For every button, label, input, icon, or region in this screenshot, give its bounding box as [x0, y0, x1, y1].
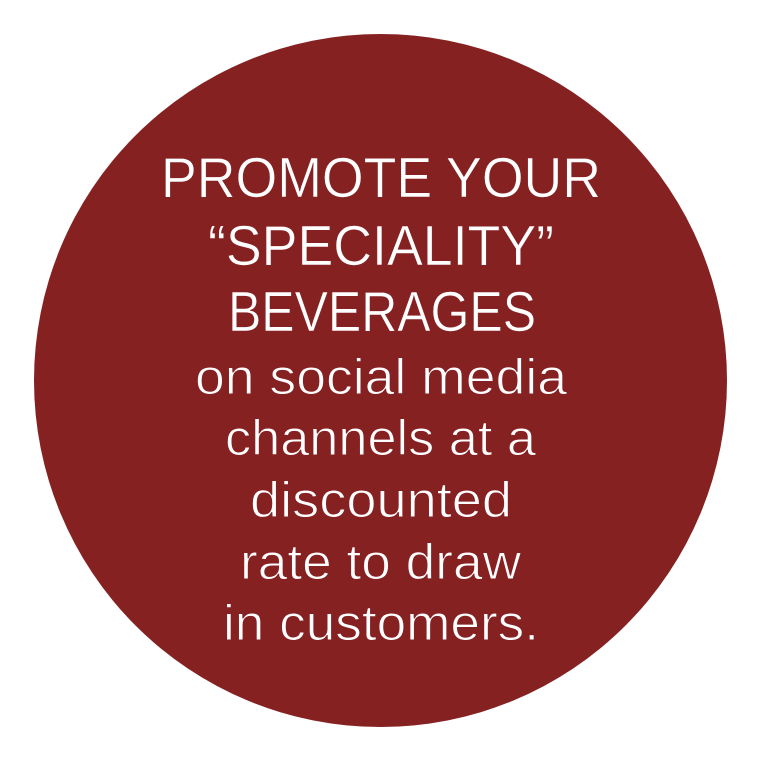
body line 5: in customers.	[223, 595, 539, 651]
body line 1: on social media	[195, 349, 567, 405]
body line 3: discounted	[250, 472, 512, 528]
body line 4: rate to draw	[240, 534, 522, 590]
heading line 3: BEVERAGES	[228, 280, 536, 344]
text block: message	[161, 146, 601, 651]
heading line 1: PROMOTE YOUR	[161, 146, 601, 210]
body line 2: channels at a	[225, 410, 536, 466]
heading line 2: “SPECIALITY”	[208, 214, 554, 278]
